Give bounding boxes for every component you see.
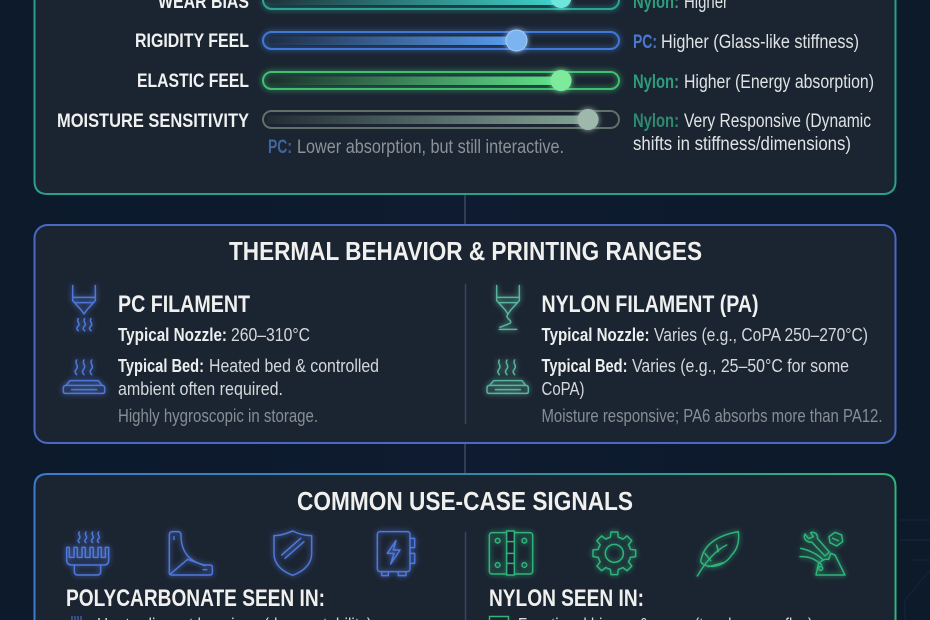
block: nylon filament: [542, 291, 882, 426]
icon: electrical box: [377, 532, 415, 576]
row: elastic feel: [137, 70, 874, 93]
row: elastic feel: Higher (Energy absorption): [684, 72, 874, 93]
panel: material feel sliders: [34, 0, 896, 194]
block: PC filament: ambient often required.: [118, 378, 283, 399]
row: moisture sensitivity: MOISTURE SENSITIVITY: [57, 111, 249, 132]
heading: use-case: COMMON USE-CASE SIGNALS: [297, 486, 633, 516]
row: elastic feel: Nylon:: [633, 72, 679, 93]
heading: thermal: THERMAL BEHAVIOR & PRINTING RANGES: [229, 236, 702, 266]
connector line: panels: [464, 194, 466, 474]
block: PC filament: 260–310°C: [231, 324, 310, 345]
block: PC filament: Highly hygroscopic in storage.: [118, 406, 318, 426]
panel: thermal behavior: [34, 225, 896, 443]
row: moisture sensitivity: Very Responsive (Dynamic: [684, 111, 871, 132]
icon: nylon bed: [487, 360, 528, 393]
block: PC filament: Heated bed & controlled: [209, 355, 379, 376]
icon: hinge: [489, 531, 533, 575]
note: PC moisture: Lower absorption, but still interactive.: [297, 137, 564, 158]
block: nylon filament: Typical Nozzle:: [542, 324, 650, 345]
icon: PC nozzle: [73, 286, 95, 331]
block: nylon filament: CoPA): [542, 378, 584, 399]
icon: heater housing: [67, 532, 109, 575]
block: nylon filament: Typical Bed:: [542, 355, 628, 376]
panel: use-case signals: [34, 474, 896, 620]
block: PC filament: [118, 291, 379, 426]
block: nylon filament: NYLON FILAMENT (PA): [542, 291, 758, 318]
row: moisture sensitivity: shifts in stiffness/dimensions): [633, 134, 851, 155]
row: wear bias: [158, 0, 729, 13]
icon: feather: [697, 532, 739, 576]
block: PC filament: PC FILAMENT: [118, 291, 250, 318]
subheading: nylon: NYLON SEEN IN:: [489, 585, 644, 612]
row: moisture sensitivity: [57, 109, 871, 155]
row: elastic feel: ELASTIC FEEL: [137, 71, 249, 92]
icon: wrench and impact: [800, 532, 845, 575]
subheading: polycarbonate: POLYCARBONATE SEEN IN:: [66, 585, 325, 612]
icon: nylon nozzle: [497, 286, 519, 329]
row: moisture sensitivity: Nylon:: [633, 111, 679, 132]
block: PC filament: Typical Bed:: [118, 355, 204, 376]
block: nylon filament: Varies (e.g., 25–50°C for some: [632, 355, 849, 376]
icon: shield: [274, 531, 312, 575]
note: PC moisture: PC:: [268, 137, 292, 158]
row: rigidity feel: PC:: [633, 32, 657, 53]
block: PC filament: Typical Nozzle:: [118, 324, 227, 345]
icon: PC heated bed: [63, 360, 105, 393]
row: rigidity feel: [135, 30, 859, 53]
icon: bracket: [169, 532, 212, 575]
block: nylon filament: Varies (e.g., CoPA 250–270°C): [654, 324, 868, 345]
row: rigidity feel: RIGIDITY FEEL: [135, 31, 249, 52]
icon: gear: [593, 532, 636, 575]
row: rigidity feel: Higher (Glass-like stiffness): [661, 32, 859, 53]
